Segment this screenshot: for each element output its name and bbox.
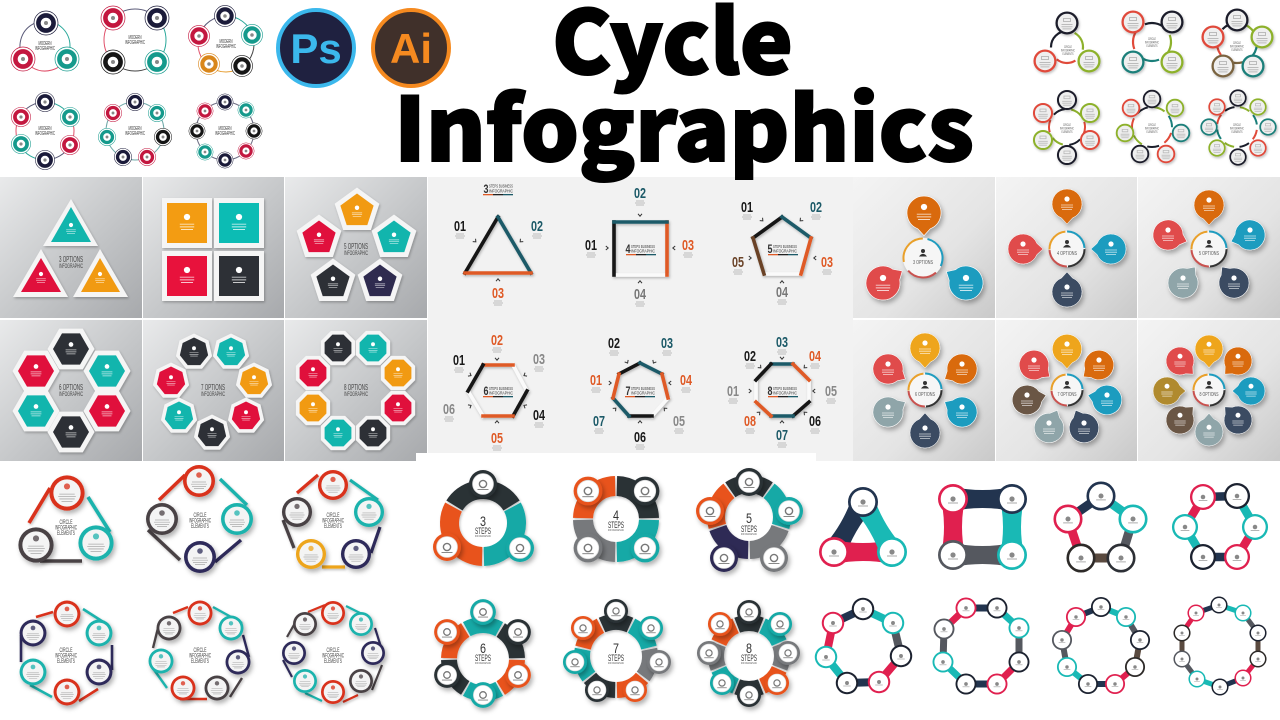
diagram: 5 steps pentagon: 5 xyxy=(768,242,773,256)
diagram: 3 steps ring: STEPS xyxy=(475,526,491,536)
diagram: 4 steps square: 03 xyxy=(682,237,694,254)
diagram: 6 steps hexagon: 01 xyxy=(453,352,465,369)
diagram: 6 steps hexagon: 02 xyxy=(491,332,503,349)
diagram: 6 steps hexagon xyxy=(443,332,545,450)
panel: 7 options heptagons: INFOGRAPHIC xyxy=(201,392,225,398)
panel: speech bubbles, 6 options xyxy=(853,320,995,461)
diagram: 4 steps square: 4 xyxy=(626,242,631,256)
diagram: 8 steps octagon: 01 xyxy=(727,383,739,400)
panel: circle belts, 3 elements: CIRCLE xyxy=(60,519,73,526)
diagram: 7 steps heptagon: 05 xyxy=(673,413,685,430)
diagram: 7 steps ring: STEPS xyxy=(608,653,624,663)
diagram: 3 steps ring: INFOGRAPHIC xyxy=(475,534,492,538)
diagram: 6 steps hexagon: 6 xyxy=(484,384,489,398)
panel: speech bubbles, 4 options xyxy=(996,177,1137,318)
diagram: 7 steps heptagon: 07 xyxy=(593,413,605,430)
diagram: 7 steps heptagon: 06 xyxy=(634,429,646,446)
diagram: 4 steps square xyxy=(585,185,694,306)
diagram: 5 steps ring: INFOGRAPHIC xyxy=(741,532,758,536)
cycle 6 nodes xyxy=(5,91,85,171)
title: Cycle Infographics: Infographics xyxy=(394,60,974,187)
circle 5 options: INFOGRAPHIC xyxy=(1230,44,1244,48)
panel: circle belts, 5 elements: CIRCLE xyxy=(326,512,340,519)
cycle 5 nodes: INFOGRAPHIC xyxy=(216,44,236,50)
panel: circle belts, 4 elements: ELEMENTS xyxy=(191,523,209,530)
panel: circle belts, 8 elements xyxy=(282,601,385,704)
diagram: 7 steps heptagon: INFOGRAPHIC xyxy=(631,390,655,396)
panel: 6 options hexagons xyxy=(0,320,142,461)
panel: circle belts, 4 elements: CIRCLE xyxy=(194,512,207,519)
diagram: 8 steps octagon: 06 xyxy=(809,413,821,430)
panel: circle infographic elements, top right xyxy=(1034,10,1276,165)
panel: circle belts, 7 elements: CIRCLE xyxy=(194,647,207,654)
circle 6 options: CIRCLE xyxy=(1063,123,1071,127)
circle 4 options: ELEMENTS xyxy=(1146,44,1158,48)
diagram: linked nodes, 6 xyxy=(1172,483,1268,570)
diagram: 3 steps triangle: 02 xyxy=(531,218,543,235)
panel: speech bubbles, 8 options: 8 OPTIONS xyxy=(1200,392,1219,398)
diagram: 6 steps hexagon: 05 xyxy=(491,430,503,447)
diagram: 5 steps pentagon: 02 xyxy=(810,199,822,216)
diagram: 6 steps hexagon: 03 xyxy=(533,351,545,368)
circle 6 options: INFOGRAPHIC xyxy=(1060,126,1074,130)
diagram: 5 steps ring: 5 xyxy=(746,510,752,526)
panel: speech bubbles, 3 options xyxy=(853,177,995,318)
cycle 3 nodes: MODERN xyxy=(38,41,52,47)
cycle 6 nodes: INFOGRAPHIC xyxy=(35,131,55,137)
circle 6 options: ELEMENTS xyxy=(1062,130,1073,134)
panel: circle belts, 8 elements: ELEMENTS xyxy=(324,658,342,665)
panel: gray option polygons, 3 options triangles: INFOGRAPHIC xyxy=(59,264,83,270)
white strip over panel bottom xyxy=(416,453,816,461)
panel: 8 options octagons: 8 OPTIONS xyxy=(344,383,368,392)
cycle 4 nodes xyxy=(91,0,179,84)
diagram: 5 steps pentagon: STEPS BUSINESS xyxy=(773,244,797,250)
diagram: 4 steps ring: 4 xyxy=(613,507,619,523)
circle 5 options xyxy=(1203,10,1272,76)
cycle 5 nodes: MODERN xyxy=(220,39,233,45)
panel: speech bubbles, 4 options: 4 OPTIONS xyxy=(1057,251,1077,257)
diagram: 8 steps ring xyxy=(697,600,800,707)
panel: circle belts, 3 elements xyxy=(18,475,114,563)
panel: circle belts, 8 elements: CIRCLE xyxy=(326,647,340,654)
circle 7 options: INFOGRAPHIC xyxy=(1145,126,1159,130)
panel: speech bubbles, 7 options: 7 OPTIONS xyxy=(1058,392,1077,398)
diagram: 8 steps octagon: 07 xyxy=(776,427,788,444)
diagram: linked nodes, 4 xyxy=(938,484,1027,570)
panel: 8 options octagons: INFOGRAPHIC xyxy=(344,392,368,398)
diagram: 7 steps heptagon xyxy=(590,335,692,449)
diagram: linked nodes, 8 xyxy=(932,598,1030,694)
panel: speech bubbles, 5 options xyxy=(1138,177,1280,318)
diagram: 3 steps triangle: 03 xyxy=(492,285,504,302)
diagram: 4 steps square: STEPS BUSINESS xyxy=(631,244,655,250)
diagram: 5 steps ring: STEPS xyxy=(741,524,757,534)
diagram: 5 steps pentagon: 03 xyxy=(821,254,833,271)
panel: circle belts, 6 elements xyxy=(20,601,112,705)
diagram: 6 steps ring: INFOGRAPHIC xyxy=(475,661,492,665)
panel: 5 options pentagons xyxy=(285,177,427,318)
cycle 4 nodes: MODERN xyxy=(128,35,142,41)
diagram: 4 steps ring: INFOGRAPHIC xyxy=(608,528,625,532)
cycle 7 nodes: MODERN xyxy=(128,126,142,132)
circle 4 options: CIRCLE xyxy=(1148,37,1156,41)
cycle 7 nodes xyxy=(98,93,172,166)
diagram: 8 steps ring: STEPS xyxy=(741,653,757,663)
panel: modern infographic cycles, top left xyxy=(5,0,265,171)
diagram: 6 steps ring: STEPS xyxy=(475,653,491,663)
panel: business steps background xyxy=(428,177,853,461)
diagram: 5 steps pentagon: 04 xyxy=(776,284,788,301)
circle 5 options: ELEMENTS xyxy=(1232,48,1243,52)
diagram: 8 steps octagon: 8 xyxy=(768,384,773,398)
panel: 8 options octagons xyxy=(285,320,427,461)
panel: circle belts, 4 elements: INFOGRAPHIC xyxy=(189,518,211,524)
circle 3 options: CIRCLE xyxy=(1064,45,1072,49)
diagram: 5 steps pentagon xyxy=(732,199,833,304)
diagram: 8 steps octagon: 05 xyxy=(825,383,837,400)
title: Cycle Infographics xyxy=(394,0,974,187)
panel: 4 options squares xyxy=(143,177,284,318)
panel: 5 options pentagons: INFOGRAPHIC xyxy=(344,251,368,257)
diagram: 4 steps ring: STEPS xyxy=(608,520,624,530)
diagram: 8 steps octagon: 04 xyxy=(809,348,821,365)
circle 4 options: INFOGRAPHIC xyxy=(1145,40,1159,44)
panel: circle belts, 4 elements xyxy=(146,465,253,573)
panel: speech bubbles, 8 options xyxy=(1138,320,1280,461)
diagram: 8 steps octagon: STEPS BUSINESS xyxy=(773,386,797,392)
panel: 6 options hexagons: 6 OPTIONS xyxy=(59,383,83,392)
panel: circle belts, 7 elements xyxy=(149,601,250,700)
diagram: 6 steps hexagon: 04 xyxy=(533,407,545,424)
diagram: 4 steps square: 04 xyxy=(634,286,646,303)
circle 7 options: CIRCLE xyxy=(1148,123,1156,127)
diagram: 4 steps square: 02 xyxy=(634,185,646,202)
circle 8 options: INFOGRAPHIC xyxy=(1230,126,1244,130)
panel: circle belts, 7 elements: INFOGRAPHIC xyxy=(189,652,211,660)
diagram: 3 steps triangle: INFOGRAPHIC xyxy=(489,188,513,194)
panel: 5 options pentagons: 5 OPTIONS xyxy=(344,242,368,251)
diagram: 3 steps triangle: 01 xyxy=(454,218,466,235)
panel: gray option polygons, 3 options triangles: 3 OPTIONS xyxy=(59,255,83,264)
diagram: 6 steps hexagon: 06 xyxy=(443,401,455,418)
panel: circle belts, 6 elements: CIRCLE xyxy=(60,647,73,654)
circle 6 options xyxy=(1034,91,1099,164)
cycle 7 nodes: INFOGRAPHIC xyxy=(125,131,145,137)
cycle 3 nodes: INFOGRAPHIC xyxy=(35,46,55,52)
circle 7 options xyxy=(1117,91,1189,162)
cycle 6 nodes: MODERN xyxy=(38,126,52,132)
circle 7 options: ELEMENTS xyxy=(1146,130,1158,134)
diagram: 7 steps ring xyxy=(563,599,671,704)
diagram: 6 steps ring xyxy=(434,599,531,708)
diagram: 7 steps heptagon: STEPS BUSINESS xyxy=(631,386,655,392)
circle 3 options: ELEMENTS xyxy=(1062,52,1074,56)
circle 8 options xyxy=(1201,90,1276,165)
cycle 8 nodes: MODERN xyxy=(218,126,232,132)
diagram: 8 steps ring: 8 xyxy=(746,640,752,656)
panel: speech bubbles, 7 options xyxy=(996,320,1137,461)
panel: circle belts, 5 elements: ELEMENTS xyxy=(324,523,342,530)
circle 3 options: INFOGRAPHIC xyxy=(1061,48,1075,52)
diagram: 5 steps pentagon: INFOGRAPHIC xyxy=(773,248,797,254)
cycle 3 nodes xyxy=(11,11,79,80)
panel: 7 options heptagons: 7 OPTIONS xyxy=(201,383,225,392)
diagram: 3 steps triangle: STEPS BUSINESS xyxy=(489,184,513,190)
diagram: 3 steps ring: 3 xyxy=(480,513,486,529)
diagram: 6 steps ring: 6 xyxy=(480,640,486,656)
panel: speech bubbles, 6 options: 6 OPTIONS xyxy=(915,392,935,398)
panel: circle belts, 3 elements: INFOGRAPHIC xyxy=(55,524,77,532)
diagram: 8 steps octagon: 02 xyxy=(744,348,756,365)
diagram: 5 steps ring xyxy=(696,468,803,572)
panel: 7 options heptagons xyxy=(143,320,284,461)
cycle 8 nodes xyxy=(189,94,262,168)
diagram: linked nodes, 10 xyxy=(1173,596,1267,696)
diagram: 8 steps octagon xyxy=(727,334,837,447)
icon: Photoshop logo xyxy=(278,10,354,86)
panel: gray option polygons, 3 options triangles xyxy=(0,177,142,318)
icon: Photoshop logo: Ps xyxy=(290,25,342,72)
panel: speech bubbles, 3 options: 3 OPTIONS xyxy=(913,260,933,266)
diagram: 7 steps heptagon: 02 xyxy=(608,335,620,352)
diagram: 7 steps ring: INFOGRAPHIC xyxy=(608,661,625,665)
panel: 6 options hexagons: INFOGRAPHIC xyxy=(59,392,83,398)
diagram: 7 steps heptagon: 01 xyxy=(590,372,602,389)
panel: circle belts, 6 elements: INFOGRAPHIC xyxy=(55,652,77,660)
panel: circle belts, 5 elements: INFOGRAPHIC xyxy=(322,518,344,524)
diagram: 3 steps ring xyxy=(433,470,534,569)
diagram: 8 steps octagon: 08 xyxy=(744,413,756,430)
panel: circle belts, 6 elements: ELEMENTS xyxy=(57,658,75,665)
icon: Illustrator logo: Ai xyxy=(390,25,432,72)
diagram: 4 steps square: 01 xyxy=(585,237,597,254)
diagram: 4 steps square: INFOGRAPHIC xyxy=(631,248,655,254)
circle 8 options: CIRCLE xyxy=(1233,123,1241,127)
circle 5 options: CIRCLE xyxy=(1233,41,1241,45)
diagram: 7 steps heptagon: 7 xyxy=(626,384,631,398)
diagram: linked nodes, 3 xyxy=(819,487,907,567)
circle 3 options xyxy=(1035,13,1099,71)
diagram: 6 steps hexagon: INFOGRAPHIC xyxy=(489,390,513,396)
diagram: 5 steps pentagon: 01 xyxy=(741,199,753,216)
cycle 4 nodes: INFOGRAPHIC xyxy=(125,40,145,46)
diagram: 8 steps octagon: INFOGRAPHIC xyxy=(773,390,797,396)
diagram: 5 steps pentagon: 05 xyxy=(732,254,744,271)
panel: speech bubbles, 5 options: 5 OPTIONS xyxy=(1199,251,1219,257)
cycle 8 nodes: INFOGRAPHIC xyxy=(215,131,235,137)
diagram: 7 steps heptagon: 04 xyxy=(680,372,692,389)
panel: circle belts, 8 elements: INFOGRAPHIC xyxy=(322,652,344,660)
panel: circle belts, 7 elements: ELEMENTS xyxy=(191,658,209,665)
diagram: 6 steps hexagon: STEPS BUSINESS xyxy=(489,386,513,392)
diagram: 7 steps ring: 7 xyxy=(613,640,619,656)
diagram: 3 steps triangle xyxy=(454,182,543,305)
diagram: linked nodes, 7 xyxy=(815,598,912,694)
diagram: 8 steps octagon: 03 xyxy=(776,334,788,351)
diagram: 3 steps triangle: 3 xyxy=(484,182,489,196)
panel: circle belts, 5 elements xyxy=(282,470,384,569)
icon: Illustrator logo xyxy=(373,10,449,86)
diagram: linked nodes, 5 xyxy=(1053,481,1148,573)
diagram: 8 steps ring: INFOGRAPHIC xyxy=(741,661,758,665)
panel: circle belts, 3 elements: ELEMENTS xyxy=(57,530,75,537)
circle 8 options: ELEMENTS xyxy=(1232,130,1243,134)
diagram: linked nodes, 9 xyxy=(1052,597,1150,694)
circle 4 options xyxy=(1123,12,1182,72)
diagram: 4 steps ring xyxy=(574,477,659,562)
diagram: 7 steps heptagon: 03 xyxy=(661,335,673,352)
cycle 5 nodes xyxy=(187,5,265,83)
